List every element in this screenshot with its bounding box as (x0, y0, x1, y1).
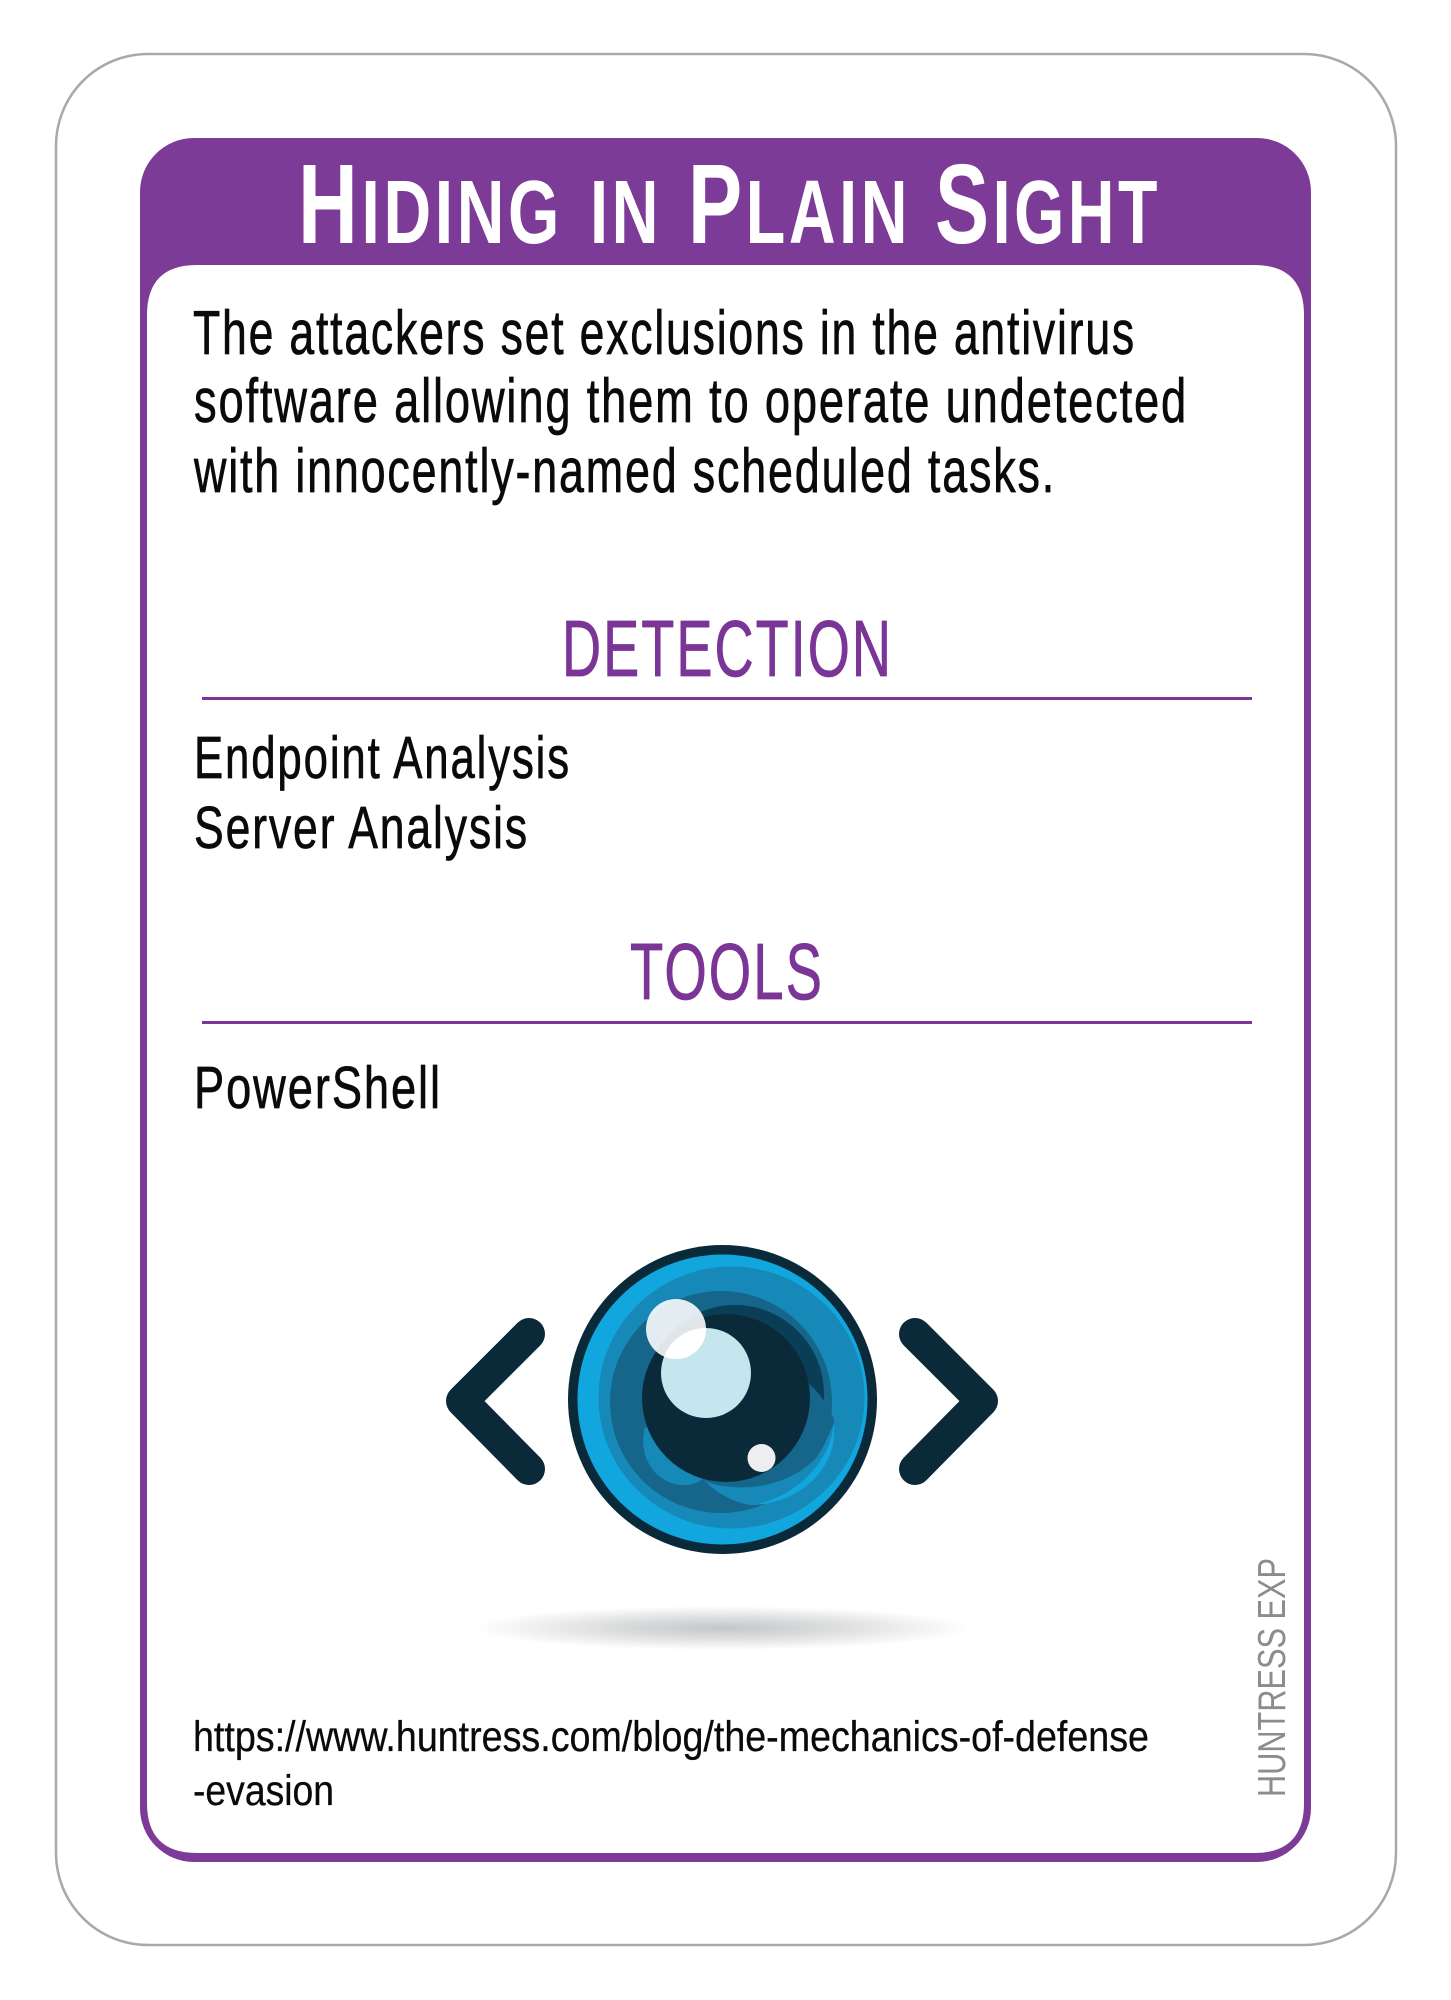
title (298, 141, 1161, 267)
icon: right chevron (915, 1334, 982, 1469)
detection rule (202, 697, 1252, 700)
source url: -evasion (193, 1767, 334, 1815)
title: IN (590, 163, 662, 263)
title: SIGHT (935, 141, 1161, 267)
icon: left chevron (462, 1334, 529, 1469)
title: HIDING (298, 141, 563, 267)
icon: eye with code brackets (462, 1245, 982, 1554)
source url (193, 1713, 1149, 1815)
source url: https://www.huntress.com/blog/the-mechanics-of-defense (193, 1713, 1149, 1761)
detection list: Server Analysis (194, 795, 529, 861)
heading: tools: TOOLS (630, 927, 824, 1016)
detection list (194, 725, 571, 861)
panel: white content area (147, 265, 1304, 1853)
icon: eye shadow (472, 1606, 972, 1650)
tools rule (202, 1021, 1252, 1024)
detection list: Endpoint Analysis (194, 725, 571, 791)
vertical label: HUNTRESS EXP (1251, 1558, 1294, 1797)
icon: eyeball (568, 1245, 877, 1554)
panel: purple frame (140, 138, 1311, 1862)
tools list: PowerShell (194, 1055, 442, 1121)
heading: detection: DETECTION (562, 604, 893, 693)
description text: with innocently-named scheduled tasks. (193, 437, 1056, 506)
title: PLAIN (688, 141, 911, 267)
description text (193, 299, 1188, 506)
